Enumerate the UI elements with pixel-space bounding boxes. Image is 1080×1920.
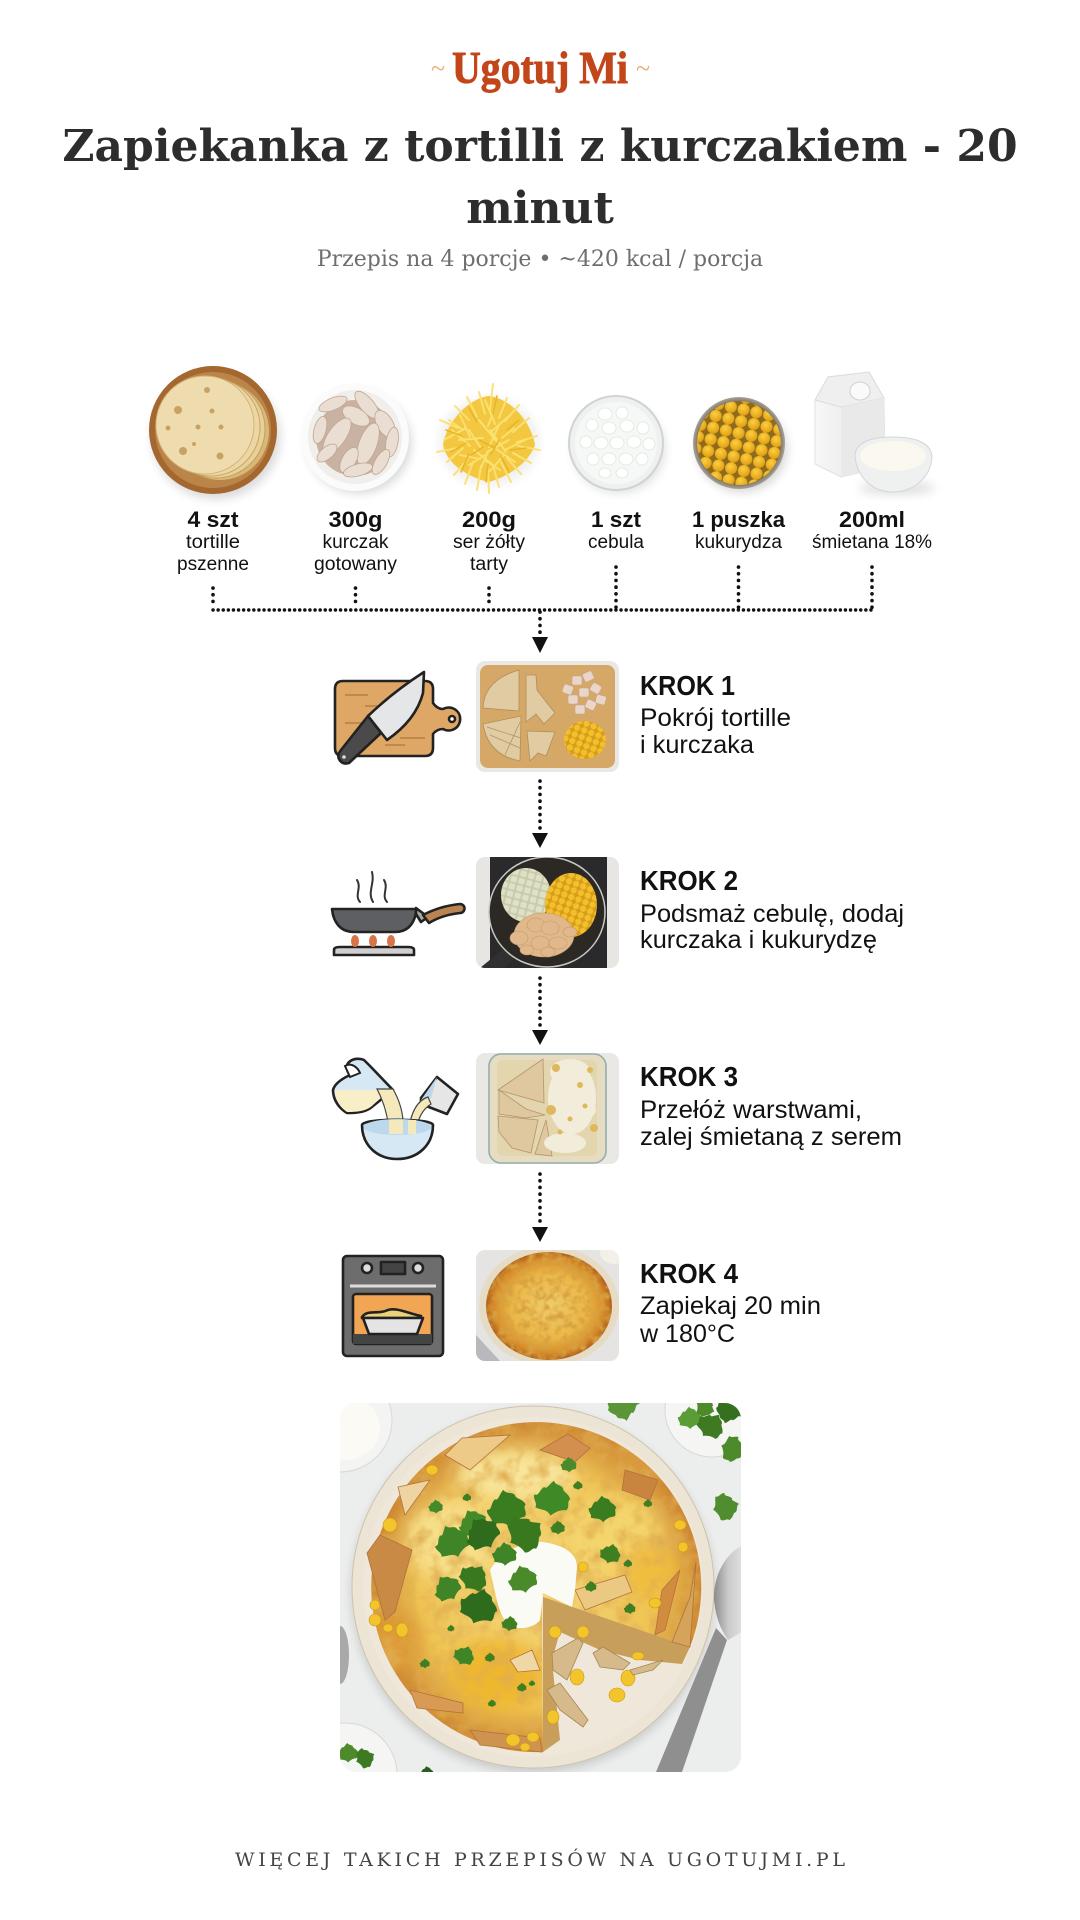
ingredient labels: gotowany bbox=[314, 554, 398, 575]
text: step 3 bbox=[640, 1061, 902, 1151]
spoon bbox=[656, 1544, 745, 1772]
logo: Ugotuj Mi bbox=[452, 42, 628, 93]
panel: step 3 photo bbox=[476, 1053, 619, 1164]
ingredient labels: 4 szt bbox=[188, 507, 239, 532]
arrow: step 3 to 4 bbox=[532, 1174, 548, 1242]
ingredient labels: 200g bbox=[462, 507, 516, 532]
logo: ~ bbox=[431, 54, 445, 83]
logo: ~ bbox=[636, 54, 650, 83]
icon: oven bbox=[343, 1256, 443, 1356]
cilantro bbox=[420, 1457, 652, 1707]
ingredient labels: śmietana 18% bbox=[812, 532, 932, 553]
icon: grated yellow cheese bbox=[437, 384, 540, 493]
footer: WIĘCEJ TAKICH PRZEPISÓW NA UGOTUJMI.PL bbox=[235, 1848, 845, 1871]
text: step 2: KROK 2 bbox=[640, 865, 738, 896]
text: step 2 bbox=[640, 865, 904, 954]
loose leaves and stone bbox=[331, 1388, 741, 1779]
corn kernels bbox=[369, 1465, 688, 1751]
title: minut bbox=[466, 183, 614, 234]
melted cheese patches bbox=[360, 1420, 705, 1760]
icon: frying pan on burner bbox=[332, 872, 464, 955]
ingredient labels: pszenne bbox=[177, 554, 249, 575]
ingredient labels: 300g bbox=[328, 507, 382, 532]
icon: cooked chicken in a white bowl bbox=[301, 383, 411, 493]
ingredient labels bbox=[177, 507, 932, 575]
ingredient labels: cebula bbox=[588, 532, 644, 553]
ingredient labels: kukurydza bbox=[695, 532, 782, 553]
text: step 4 bbox=[639, 1258, 821, 1348]
icon: cream carton and bowl bbox=[815, 372, 935, 495]
icon: diced onion in a glass bowl bbox=[569, 396, 665, 493]
panel: step 2 photo bbox=[476, 857, 619, 968]
sour cream dollop bbox=[490, 1542, 577, 1628]
icon: open can of sweetcorn bbox=[693, 397, 787, 492]
casserole with a slice removed bbox=[371, 1422, 701, 1752]
tortilla edges bbox=[367, 1434, 696, 1752]
ingredient labels: tarty bbox=[470, 554, 509, 575]
text: step 4: KROK 4 bbox=[640, 1258, 738, 1289]
ingredient labels: ser żółty bbox=[453, 532, 525, 553]
side bowl: herbs bbox=[664, 1403, 741, 1462]
arrow: step 1 to 2 bbox=[532, 781, 548, 848]
arrow: ingredients connector bbox=[213, 567, 872, 653]
ingredient labels: kurczak bbox=[322, 532, 389, 553]
subtitle: Przepis na 4 porcje • ~420 kcal / porcja bbox=[317, 247, 763, 272]
text: step 3: KROK 3 bbox=[640, 1061, 738, 1092]
ingredient labels: 1 puszka bbox=[692, 507, 786, 532]
side bowl: sour cream bbox=[340, 1403, 392, 1472]
ingredient labels: 200ml bbox=[839, 507, 905, 532]
text: step 4: w 180°C bbox=[639, 1320, 735, 1348]
text: step 2: kurczaka i kukurydzę bbox=[640, 926, 877, 954]
panel: finished dish photo bbox=[340, 1403, 741, 1772]
text: step 3: Przełóż warstwami, bbox=[640, 1096, 862, 1124]
text: step 1: Pokrój tortille bbox=[640, 704, 791, 732]
icon: pouring cream into a bowl bbox=[333, 1059, 458, 1159]
panel: step 4 photo bbox=[476, 1250, 619, 1361]
title: Zapiekanka z tortilli z kurczakiem - 20 bbox=[62, 121, 1018, 172]
side bowl: chopped herbs bbox=[340, 1722, 398, 1772]
ingredient labels: tortille bbox=[186, 532, 240, 553]
arrow: step 2 to 3 bbox=[532, 978, 548, 1045]
dish bbox=[348, 1492, 717, 1772]
panel: step 1 photo bbox=[476, 661, 619, 772]
text: step 1: KROK 1 bbox=[640, 670, 735, 701]
cut layers bbox=[543, 1597, 690, 1752]
ingredient labels: 1 szt bbox=[591, 507, 642, 532]
shredded chicken bbox=[547, 1638, 663, 1727]
icon: tortillas on a wooden board bbox=[149, 366, 280, 499]
title bbox=[62, 121, 1018, 234]
text: step 2: Podsmaż cebulę, dodaj bbox=[640, 900, 904, 928]
panel: ingredients bbox=[149, 366, 935, 575]
icon: cutting board and knife bbox=[335, 672, 460, 764]
text: step 1: i kurczaka bbox=[640, 731, 754, 759]
text: step 4: Zapiekaj 20 min bbox=[640, 1292, 821, 1320]
text: step 3: zalej śmietaną z serem bbox=[640, 1123, 902, 1151]
text: step 1 bbox=[640, 670, 791, 759]
